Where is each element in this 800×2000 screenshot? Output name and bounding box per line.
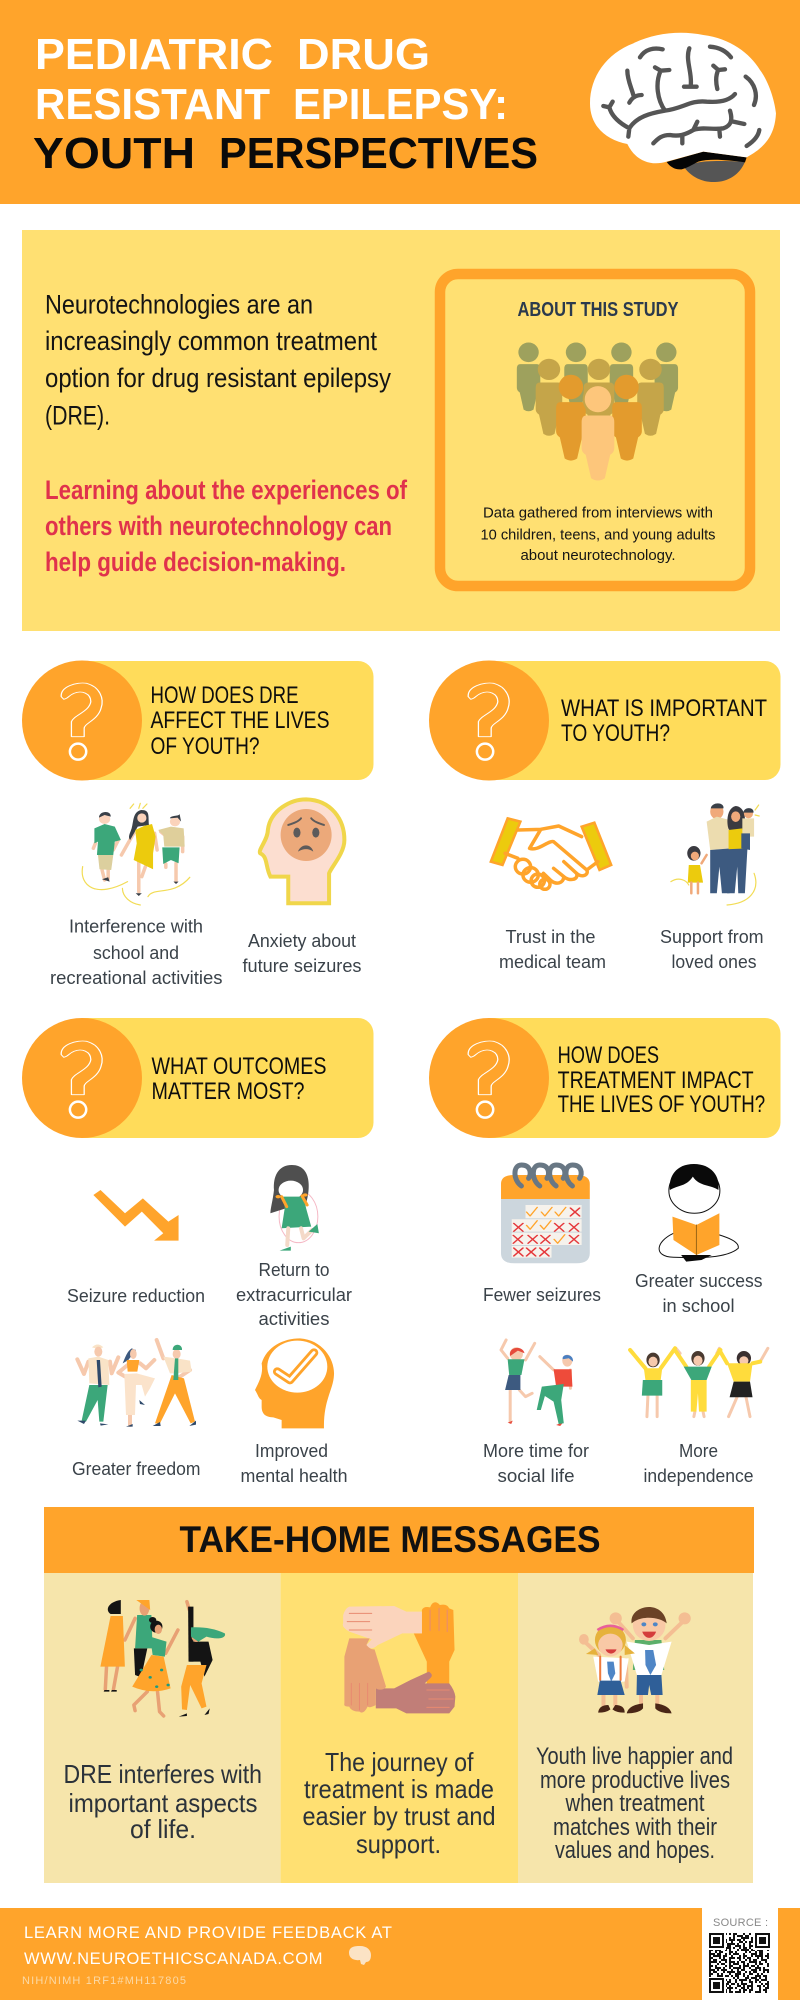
icon: girl with jump rope [270,1165,319,1251]
heading [150,682,330,760]
label: greater success in school [635,1270,762,1316]
message 3: more productive lives [540,1767,730,1794]
column 1 [44,1573,281,1883]
heading [561,695,767,747]
label: interference: school and [93,942,179,963]
icon: group of friends [100,1600,225,1717]
icon: youth walking [82,803,190,905]
icon: question mark circle [429,1018,549,1138]
label: more time for social life: social life [498,1465,574,1486]
panel: what is important [429,660,780,780]
about text: about neurotechnology. [520,547,676,564]
label: more time for social life: More time for [483,1440,589,1461]
label: anxiety: future seizures [242,955,362,976]
label: return to extracurricular activities: extracurricular [236,1284,352,1305]
highlighted message [45,475,408,577]
icon: worried head [260,799,344,903]
heading: WHAT OUTCOMES [152,1053,326,1080]
label: trust: Trust in the [506,926,596,947]
message 3 [536,1743,733,1864]
title: EPILEPSY: [293,80,508,129]
footer banner [0,1908,800,2000]
message 3: Youth live happier and [536,1743,733,1770]
label: seizure reduction: Seizure reduction [67,1285,205,1306]
message 2: easier by trust and [302,1801,496,1831]
heading: HOW DOES DRE [150,682,298,709]
label: interference: Interference with [69,916,203,937]
footer call to action: WWW.NEUROETHICSCANADA.COM [24,1950,322,1968]
icon: group of people [517,342,678,481]
panel: how does treatment impact [429,1018,780,1138]
panel: take-home messages [44,1507,754,1883]
heading: take-home messages: TAKE-HOME MESSAGES [180,1519,600,1560]
message 1: of life. [130,1814,196,1844]
icon: four linked hands [343,1602,455,1713]
footer call to action: LEARN MORE AND PROVIDE FEEDBACK AT [24,1924,392,1942]
label: anxiety: Anxiety about [248,930,356,951]
message 2: The journey of [325,1747,474,1777]
icon: child reading a book [659,1164,738,1262]
heading: TO YOUTH? [561,720,670,747]
label: improved mental health: mental health [240,1465,348,1486]
message 2 [302,1747,496,1859]
label: support: Support from [660,926,764,947]
message 2: treatment is made [304,1774,494,1804]
title: PEDIATRIC [35,30,273,79]
label: support [660,926,764,972]
column 2 [281,1573,518,1883]
icon: dancing adults [77,1340,196,1427]
title [33,30,538,178]
label: interference [50,916,222,988]
label: more independence [644,1440,754,1486]
highlighted message: others with neurotechnology can [45,511,392,541]
icon: happy school children [579,1607,691,1713]
about heading: ABOUT THIS STUDY [518,299,679,321]
heading: TREATMENT IMPACT [558,1067,754,1094]
source label: SOURCE : [713,1917,768,1929]
intro text: option for drug resistant epilepsy [45,363,391,393]
message 1: important aspects [68,1788,258,1818]
label: greater success in school: in school [662,1295,734,1316]
label: greater success in school: Greater success [635,1270,762,1291]
label: fewer seizures: Fewer seizures [483,1284,601,1305]
title: DRUG [297,30,430,79]
label: trust [499,926,606,972]
intro text [45,290,391,430]
panel: source QR code [702,1908,778,2000]
heading: OF YOUTH? [150,733,260,760]
title: PERSPECTIVES [219,129,538,178]
highlighted message: Learning about the experiences of [45,475,408,505]
panel: introduction [22,230,780,631]
heading: HOW DOES [558,1042,659,1069]
heading [152,1053,326,1105]
heading: MATTER MOST? [152,1078,304,1105]
label: improved mental health [240,1440,348,1486]
icon: question mark circle [22,660,142,780]
icon: family [671,803,759,905]
footer call to action [24,1924,392,1968]
header banner [0,0,800,204]
label: more independence: More [679,1440,718,1461]
message 1 [64,1759,262,1844]
heading: AFFECT THE LIVES [150,707,330,734]
message 3: when treatment [565,1790,705,1817]
intro text: increasingly common treatment [45,326,377,356]
label: return to extracurricular activities [236,1259,352,1329]
label: more time for social life [483,1440,589,1486]
panel: what outcomes matter [22,1018,374,1138]
about text: Data gathered from interviews with [483,504,713,522]
panel: about this study [440,274,750,586]
label: more independence: independence [644,1465,754,1486]
label: anxiety [242,930,362,976]
label: return to extracurricular activities: activities [258,1308,330,1329]
icon: two youth dancing [501,1340,573,1426]
highlighted message: help guide decision-making. [45,547,346,577]
icon: calendar [501,1165,590,1263]
icon: question mark circle [429,660,549,780]
title: RESISTANT [35,80,270,129]
message 2: support. [356,1829,441,1859]
message 3: matches with their [553,1814,717,1841]
icon: falling zigzag arrow [93,1190,179,1241]
about text: 10 children, teens, and young adults [480,526,716,544]
message 3: values and hopes. [555,1837,715,1864]
label: greater freedom: Greater freedom [72,1458,200,1479]
title: YOUTH [33,129,195,178]
panel: how does DRE affect [22,660,374,780]
icon: head with check mark [255,1338,334,1428]
icon: question mark circle [22,1018,142,1138]
intro text: Neurotechnologies are an [45,290,313,320]
icon: handshake [491,818,611,889]
about text [480,504,716,564]
label: interference: recreational activities [50,967,222,988]
icon: three youth with raised arms [630,1348,768,1417]
QR code [708,1932,770,1994]
message 1: DRE interferes with [64,1759,262,1789]
grant number: NIH/NIMH 1RF1#MH117805 [22,1975,186,1987]
icon: small brain [349,1946,371,1965]
heading: WHAT IS IMPORTANT [561,695,767,722]
icon: brain [590,33,776,182]
intro text: (DRE). [45,400,110,430]
column 3 [518,1573,753,1883]
label: improved mental health: Improved [255,1440,328,1461]
label: support: loved ones [672,951,756,972]
label: return to extracurricular activities: Return to [258,1259,330,1280]
label: trust: medical team [499,951,606,972]
heading [558,1042,765,1118]
